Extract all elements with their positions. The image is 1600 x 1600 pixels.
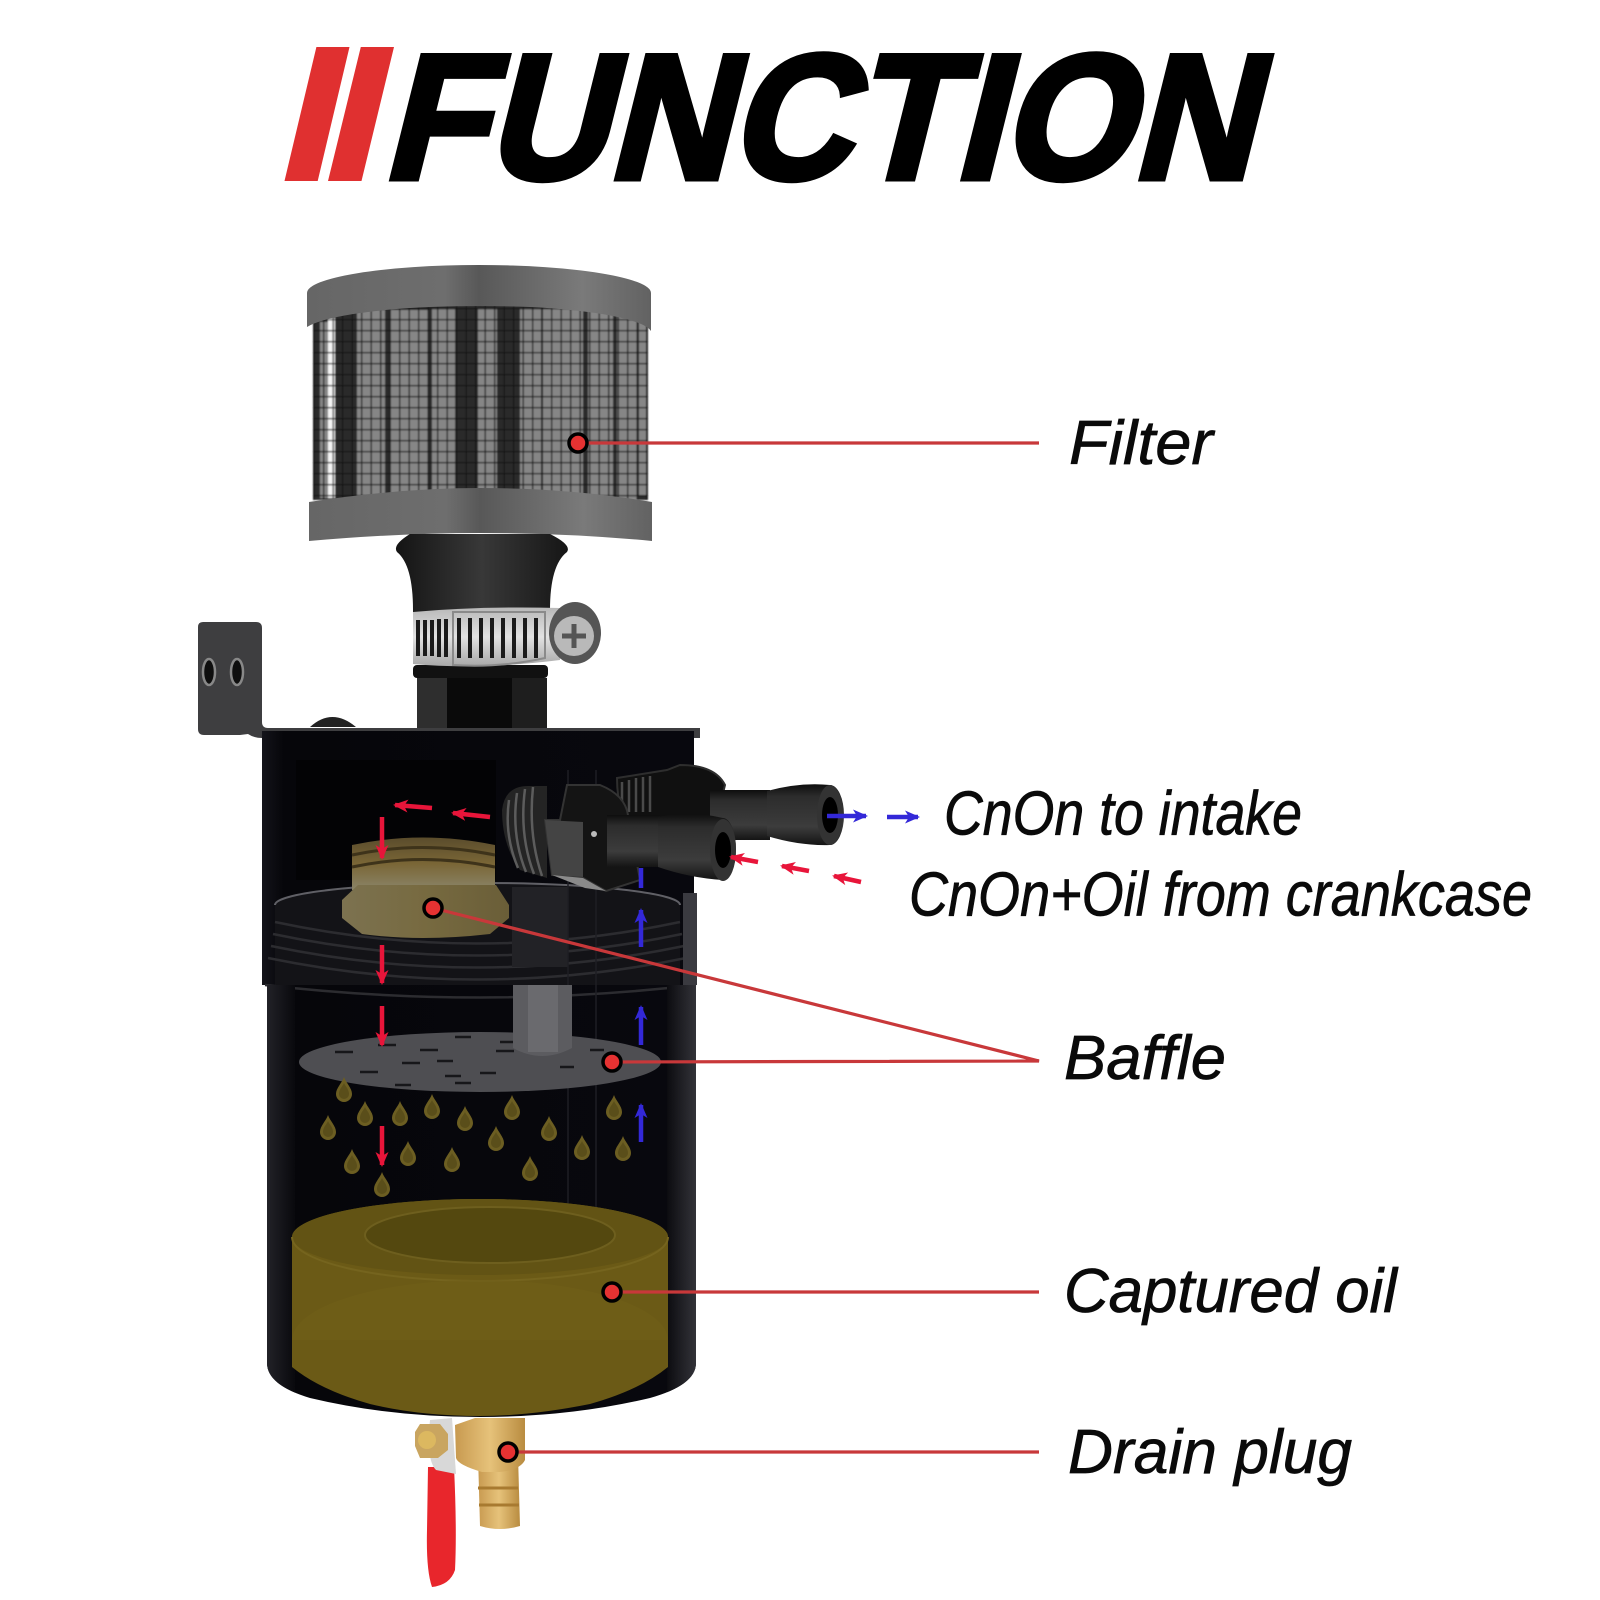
filter top band	[307, 265, 651, 331]
title	[284, 18, 1292, 217]
callout: drain plug	[499, 1418, 1352, 1487]
drain valve	[415, 1418, 525, 1587]
flow arrows: clean air out (blue)	[641, 816, 918, 1142]
brass baffle fitting	[342, 838, 509, 938]
brass nut	[415, 1424, 448, 1458]
callout: filter: Filter	[1069, 409, 1215, 478]
hose clamp	[413, 602, 601, 678]
title red slashes	[284, 47, 394, 181]
flow arrows: air and oil in (red)	[382, 805, 861, 1165]
callout: captured oil: Captured oil	[1064, 1257, 1399, 1326]
callout: baffle: Baffle	[1064, 1024, 1226, 1093]
mounting bracket	[198, 622, 700, 738]
hose barb	[478, 1455, 520, 1529]
threaded collar	[275, 883, 680, 985]
oil droplets	[320, 1077, 631, 1197]
front barb port	[502, 785, 736, 891]
baffle plate	[299, 985, 661, 1092]
filter bottom band	[309, 488, 652, 541]
filter pleats and mesh	[313, 305, 648, 500]
rear barb port	[617, 765, 844, 845]
callout: drain plug: Drain plug	[1068, 1418, 1352, 1487]
hex fitting	[417, 678, 547, 728]
valve body	[455, 1418, 525, 1472]
product illustration: catch can	[198, 265, 844, 1587]
title text: FUNCTION	[371, 18, 1292, 217]
red handle	[427, 1467, 456, 1587]
callout: captured oil	[603, 1257, 1399, 1326]
rubber neck	[396, 534, 568, 625]
callout: CnOn to intake: CnOn to intake	[944, 780, 1302, 848]
callout: filter	[569, 409, 1215, 478]
captured oil	[292, 1199, 668, 1416]
callout: baffle	[424, 899, 1226, 1093]
silver tab	[429, 1418, 456, 1474]
can body	[262, 731, 697, 1425]
air filter	[307, 265, 652, 728]
